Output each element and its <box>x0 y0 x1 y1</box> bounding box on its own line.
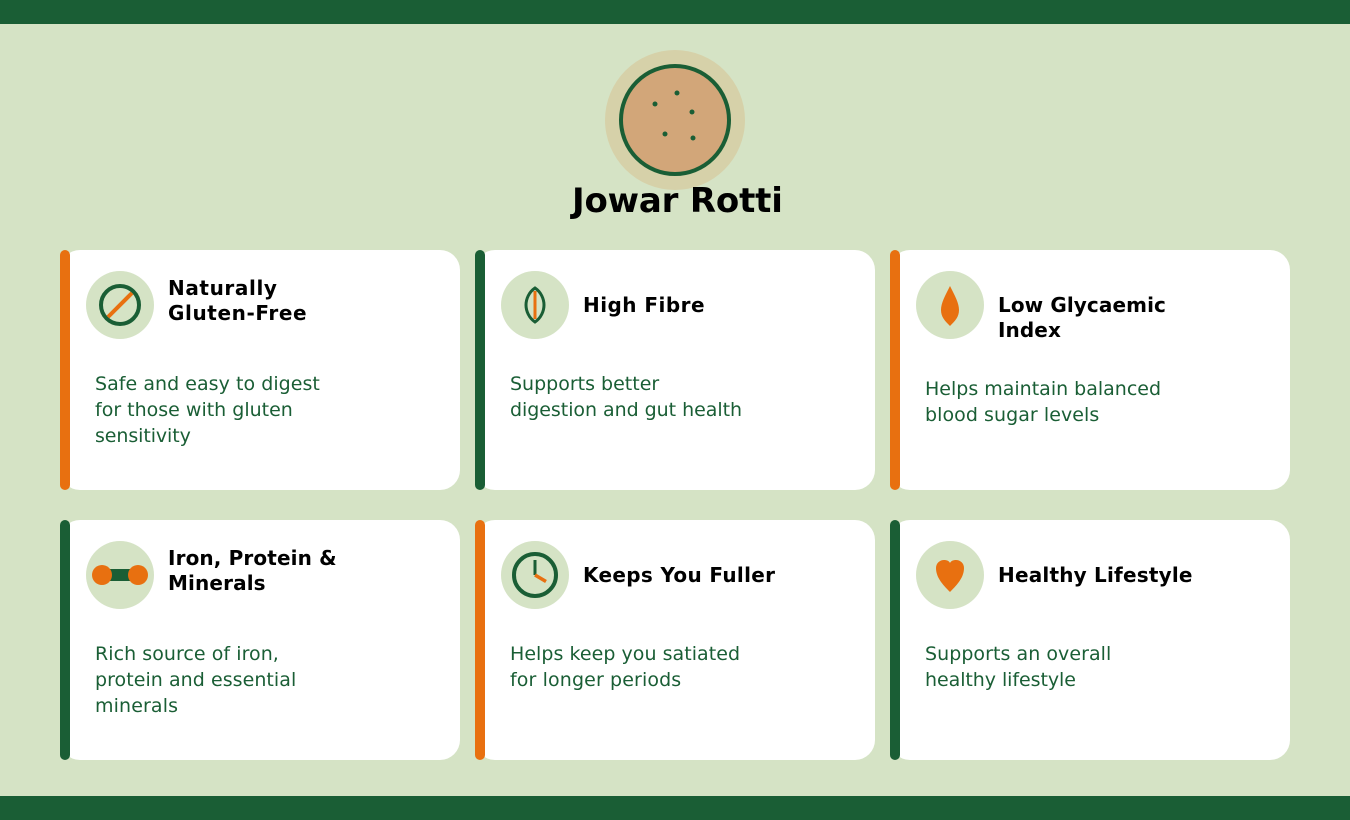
heading: low glycaemic index: Index <box>998 318 1061 342</box>
panel: keeps you fuller <box>475 520 875 760</box>
heading: iron, protein and minerals: Iron, Protein & <box>168 546 337 570</box>
icon: jowar rotti <box>605 50 745 190</box>
heading: naturally gluten-free: Gluten-Free <box>168 301 307 325</box>
text: low gi description <box>925 378 1161 426</box>
heading: naturally gluten-free <box>168 276 307 325</box>
title: Jowar Rotti <box>572 181 783 221</box>
text: fuller description: for longer periods <box>510 669 681 691</box>
text: gluten-free description <box>95 373 320 447</box>
heading: low glycaemic index <box>998 293 1166 342</box>
top band <box>0 0 1350 24</box>
text: lifestyle description <box>925 643 1111 691</box>
text: fuller description: Helps keep you satiated <box>510 643 740 665</box>
heading: iron, protein and minerals <box>168 546 337 595</box>
text: lifestyle description: Supports an overall <box>925 643 1111 665</box>
panel: high fibre <box>475 250 875 490</box>
icon: dumbbell <box>86 541 154 609</box>
bottom band <box>0 796 1350 820</box>
text: gluten-free description: sensitivity <box>95 425 191 447</box>
heading: high fibre: High Fibre <box>583 293 705 317</box>
icon: drop <box>916 271 984 339</box>
text: iron description: protein and essential <box>95 669 296 691</box>
panel: iron, protein and minerals <box>60 520 460 760</box>
icon: gluten-free <box>86 271 154 339</box>
text: high fibre description <box>510 373 742 421</box>
text: lifestyle description: healthy lifestyle <box>925 669 1076 691</box>
text: iron description: minerals <box>95 695 178 717</box>
heading: naturally gluten-free: Naturally <box>168 276 278 300</box>
panel: healthy lifestyle <box>890 520 1290 760</box>
panel: naturally gluten-free <box>60 250 460 490</box>
text: fuller description <box>510 643 740 691</box>
heading: low glycaemic index: Low Glycaemic <box>998 293 1166 317</box>
text: iron description <box>95 643 296 717</box>
icon: heart <box>916 541 984 609</box>
heading: keeps you fuller: Keeps You Fuller <box>583 563 775 587</box>
text: low gi description: Helps maintain balanced <box>925 378 1161 400</box>
text: low gi description: blood sugar levels <box>925 404 1099 426</box>
text: high fibre description: Supports better <box>510 373 659 395</box>
heading: iron, protein and minerals: Minerals <box>168 571 266 595</box>
text: gluten-free description: for those with gluten <box>95 399 293 421</box>
text: gluten-free description: Safe and easy to digest <box>95 373 320 395</box>
text: high fibre description: digestion and gut health <box>510 399 742 421</box>
heading: healthy lifestyle: Healthy Lifestyle <box>998 563 1193 587</box>
text: iron description: Rich source of iron, <box>95 643 279 665</box>
icon: clock <box>501 541 569 609</box>
icon: leaf <box>501 271 569 339</box>
panel: low glycaemic index <box>890 250 1290 490</box>
